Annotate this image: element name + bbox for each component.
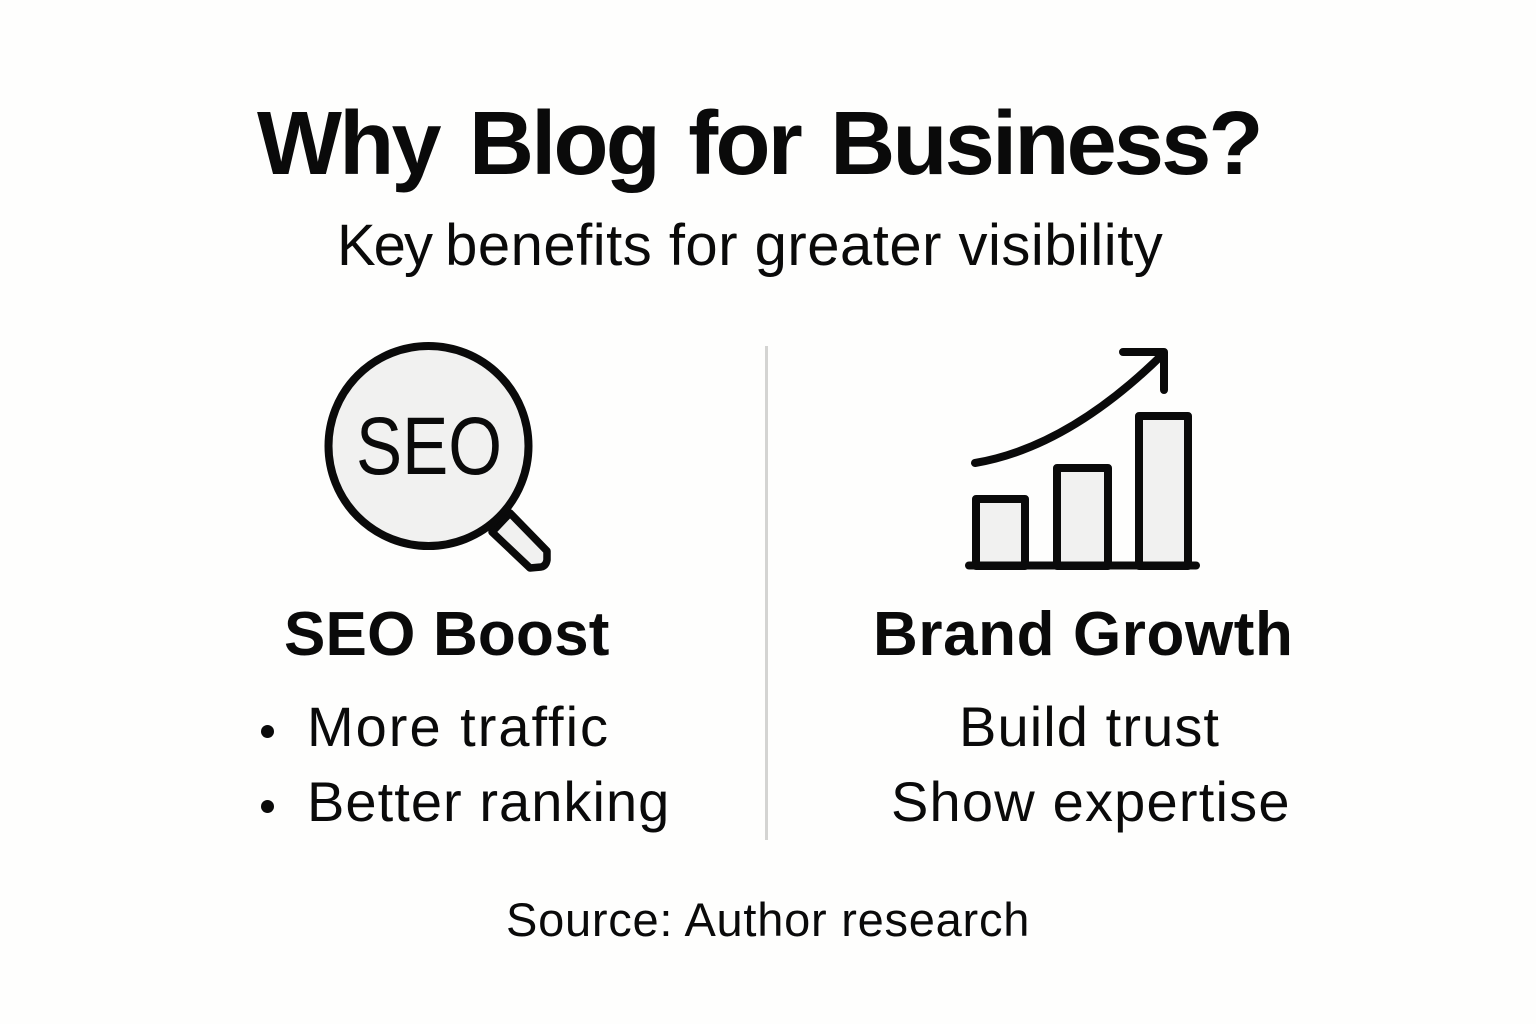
item: Show expertise: Show expertise bbox=[891, 770, 1291, 833]
icon: SEO magnifying glass bbox=[324, 342, 551, 572]
list: brand benefits bbox=[891, 695, 1291, 833]
title: Why Blog for Business? bbox=[257, 94, 1261, 194]
icon: SEO magnifying glass: SEO bbox=[356, 401, 502, 492]
item: Build trust: Build trust bbox=[959, 695, 1220, 758]
heading: SEO Boost: SEO Boost bbox=[284, 600, 610, 669]
source note: Source: Author research bbox=[506, 893, 1030, 946]
divider bbox=[765, 346, 768, 840]
icon: growth bar chart with arrow bbox=[965, 348, 1200, 570]
bullet dot one bbox=[261, 725, 274, 738]
list: SEO benefits bbox=[261, 695, 670, 833]
bullet item: More traffic: More traffic bbox=[307, 695, 610, 758]
heading: Brand Growth: Brand Growth bbox=[873, 600, 1294, 669]
bullet dot two bbox=[261, 800, 274, 813]
subtitle: Key benefits for greater visibility bbox=[337, 213, 1163, 278]
bullet item: Better ranking: Better ranking bbox=[307, 770, 670, 833]
